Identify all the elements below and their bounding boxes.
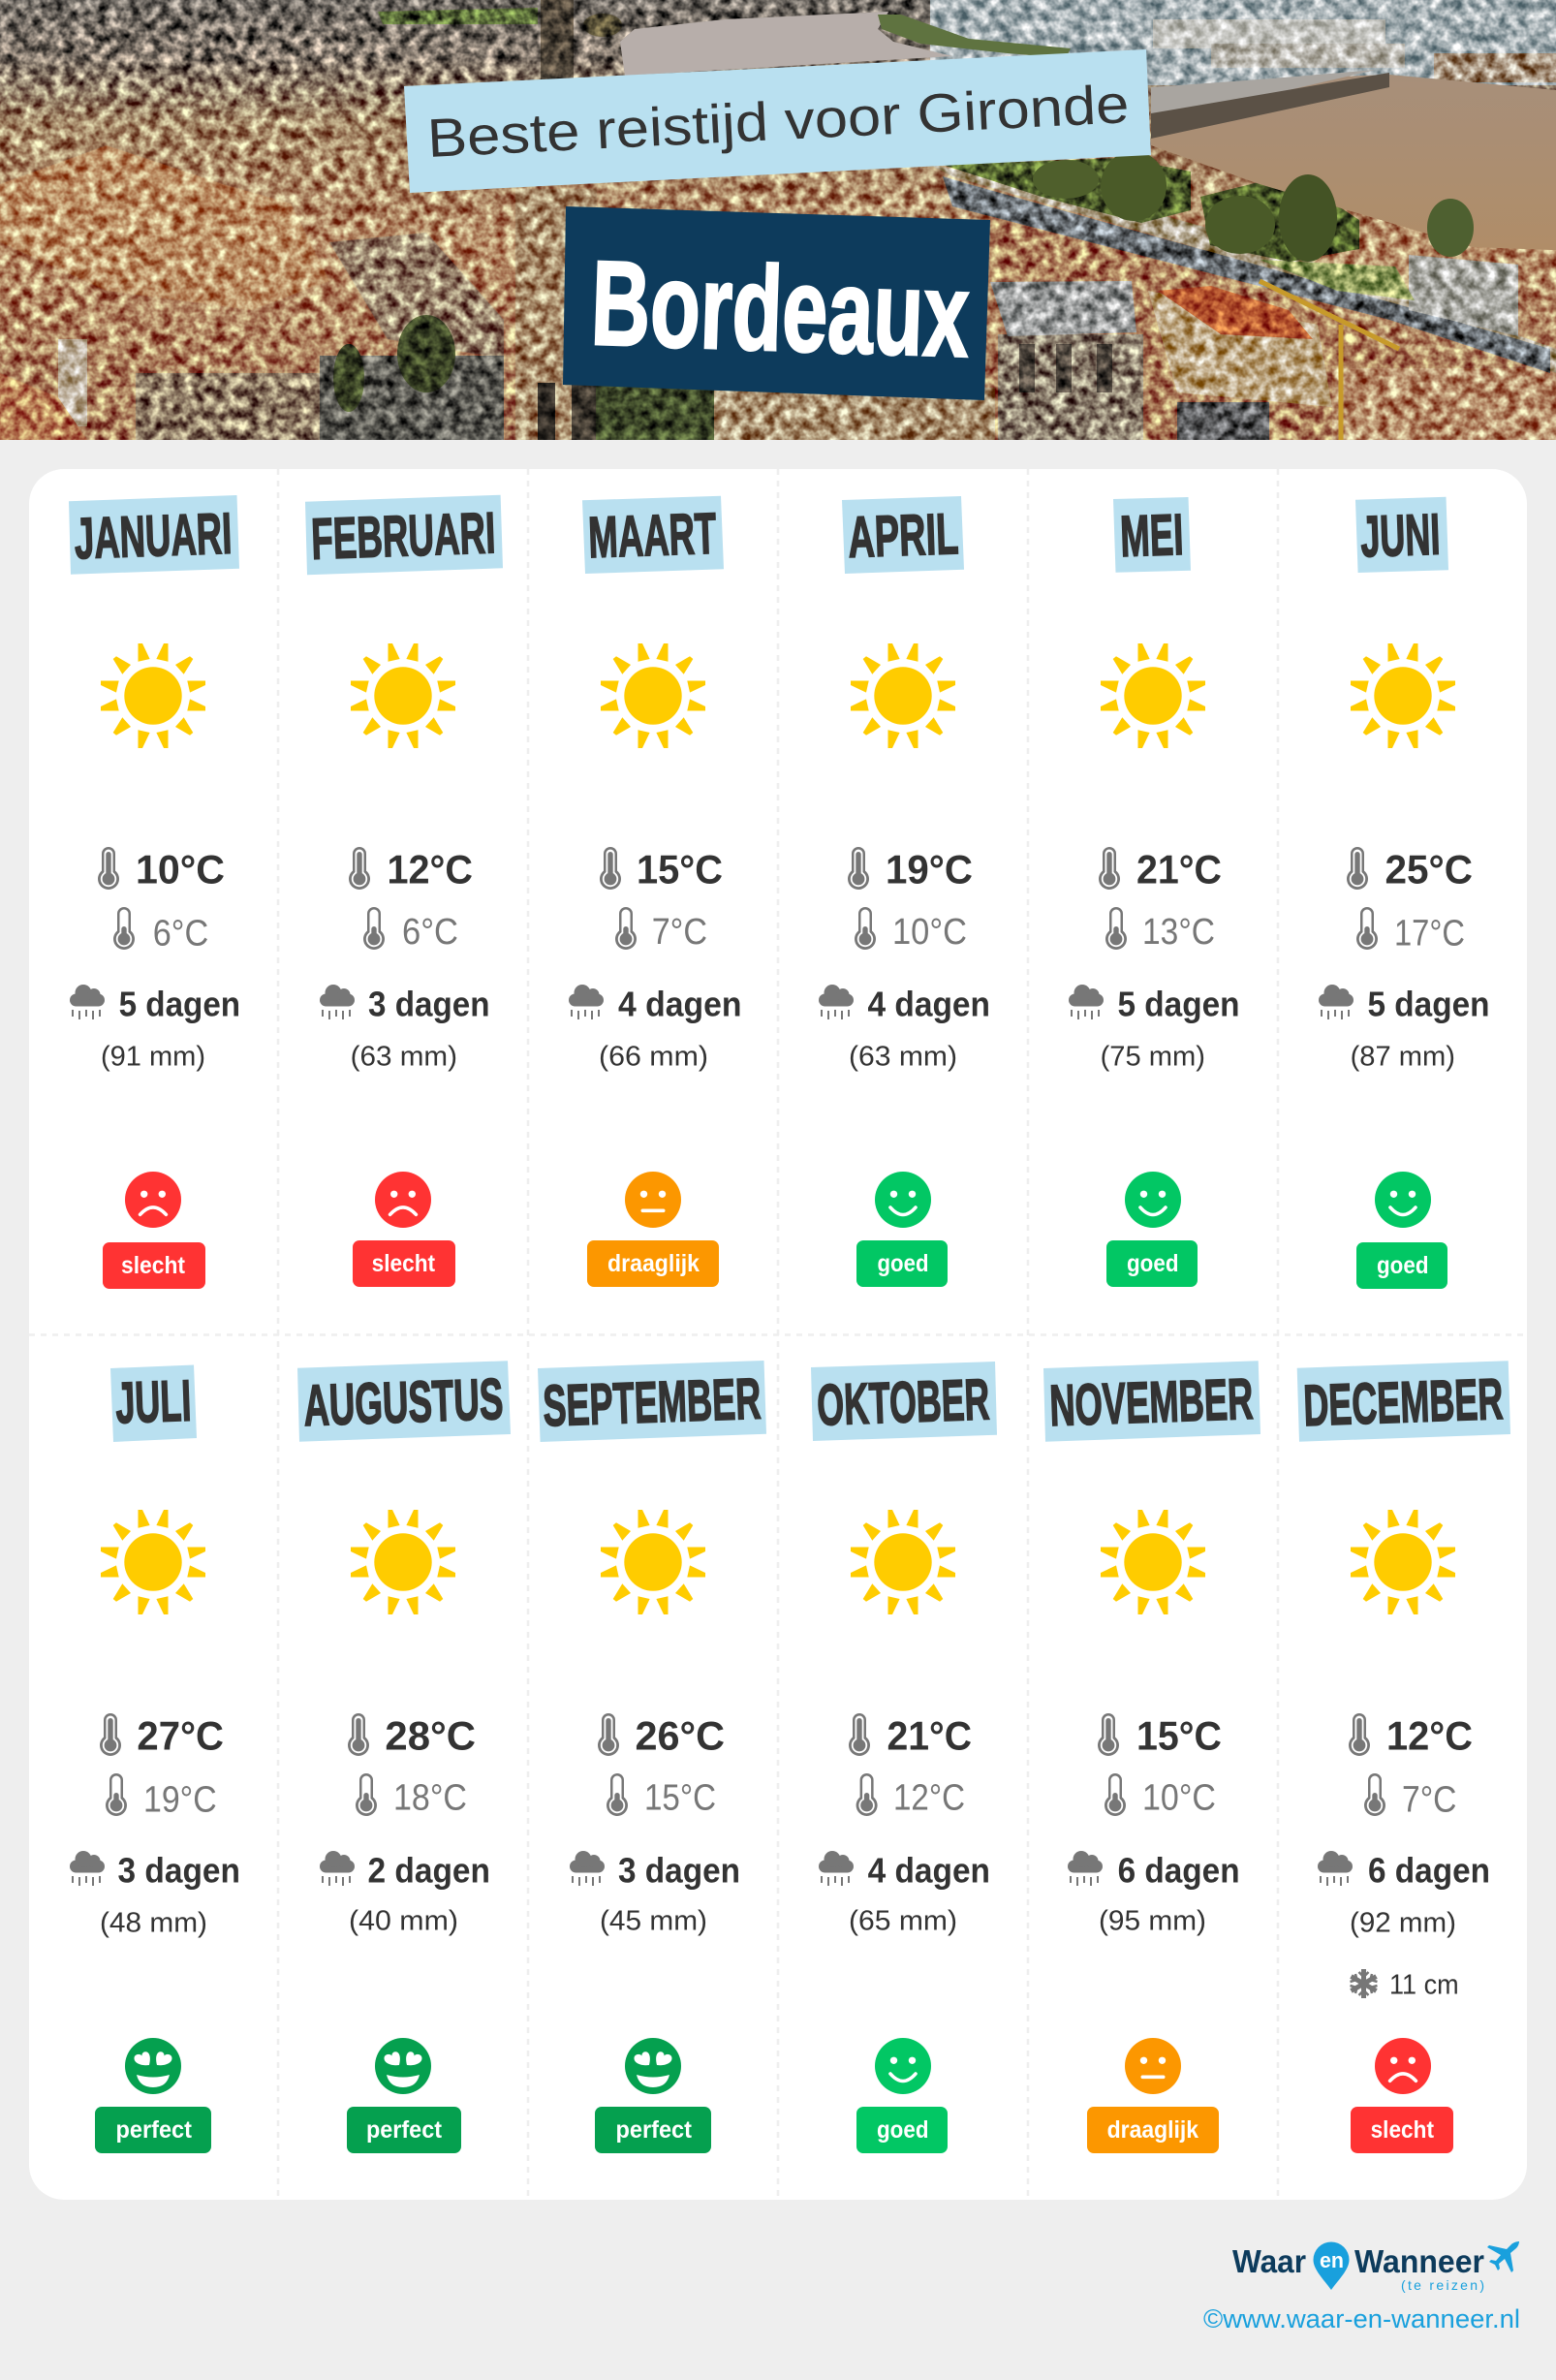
month label — [1043, 1361, 1260, 1442]
high temperature — [849, 1713, 972, 1759]
low temperature: 6°C — [153, 914, 208, 955]
rain days: 6 dagen — [1368, 1850, 1490, 1890]
rain days — [1319, 984, 1490, 1023]
low temperature — [607, 1773, 716, 1819]
low temperature — [106, 1773, 217, 1820]
panel: september — [538, 1361, 766, 2153]
high temperature: 26°C — [636, 1713, 725, 1759]
high temperature: 27°C — [137, 1713, 224, 1759]
rain days: 5 dagen — [1368, 984, 1490, 1023]
precipitation: (63 mm) — [849, 1041, 957, 1072]
low temperature: 6°C — [402, 912, 458, 953]
low temperature: 17°C — [1394, 914, 1465, 955]
icon: rating face — [625, 1172, 681, 1228]
icon: rating face — [1375, 2038, 1431, 2094]
panel: oktober — [811, 1362, 997, 2153]
rating pill: goed — [877, 2116, 928, 2144]
panel: mei — [1069, 497, 1240, 1287]
logo: Waar en Wanneer: Waar — [1232, 2243, 1306, 2279]
rating pill — [103, 1242, 205, 1289]
logo: Waar en Wanneer — [1232, 2241, 1519, 2293]
rain days: 4 dagen — [868, 984, 990, 1023]
rain days: 3 dagen — [618, 1850, 740, 1890]
month label: SEPTEMBER — [542, 1366, 762, 1438]
header photo: aerial view of Bordeaux — [0, 0, 1556, 440]
low temperature — [856, 1773, 965, 1819]
low temperature — [356, 1773, 467, 1819]
rating pill — [587, 1240, 719, 1287]
icon: sun — [1101, 643, 1205, 748]
month label — [538, 1361, 766, 1442]
rain days: 5 dagen — [119, 984, 240, 1023]
calendar card — [29, 469, 1527, 2200]
month label: MEI — [1119, 502, 1184, 569]
rain days — [570, 1850, 740, 1890]
icon: map pin: en — [1320, 2248, 1344, 2272]
high temperature: 15°C — [1136, 1713, 1222, 1759]
precipitation: (95 mm) — [1099, 1906, 1206, 1937]
rain days — [819, 984, 990, 1023]
low temperature — [363, 907, 458, 953]
rating pill: slecht — [1371, 2116, 1435, 2144]
icon: sun — [1351, 1510, 1455, 1614]
rating pill: draaglijk — [1107, 2116, 1198, 2144]
rain days — [70, 984, 240, 1023]
low temperature: 18°C — [393, 1778, 467, 1819]
rain days: 6 dagen — [1118, 1850, 1240, 1890]
month label — [69, 495, 239, 575]
rain days — [320, 1850, 490, 1890]
panel: juli — [70, 1364, 240, 2153]
low temperature: 10°C — [892, 912, 967, 953]
rating pill — [347, 2107, 461, 2153]
icon: plane — [1487, 2241, 1519, 2272]
rating pill — [1351, 2107, 1453, 2153]
rating pill — [1356, 1242, 1447, 1289]
panel: juni — [1319, 497, 1490, 1289]
rain days: 5 dagen — [1118, 984, 1240, 1023]
high temperature — [98, 847, 225, 892]
rating pill: perfect — [116, 2116, 193, 2144]
icon: sun — [101, 643, 205, 748]
icon: rating face — [625, 2038, 681, 2094]
high temperature — [1349, 1713, 1473, 1759]
rain days: 2 dagen — [368, 1850, 490, 1890]
month label — [1113, 497, 1191, 573]
icon: rating face — [1125, 1172, 1181, 1228]
high temperature — [598, 1713, 725, 1759]
low temperature — [113, 907, 208, 955]
rating pill — [353, 1240, 455, 1287]
panel: november — [1043, 1361, 1260, 2153]
rating pill: perfect — [366, 2116, 443, 2144]
rating pill — [856, 1240, 948, 1287]
high temperature — [100, 1713, 224, 1759]
month label: FEBRUARI — [310, 500, 496, 572]
icon: rating face — [375, 2038, 431, 2094]
month label — [582, 496, 724, 574]
rain days — [70, 1850, 240, 1890]
precipitation: (92 mm) — [1350, 1907, 1456, 1938]
month label: OKTOBER — [816, 1366, 990, 1438]
high temperature — [600, 847, 723, 892]
precipitation: (45 mm) — [600, 1906, 707, 1937]
low temperature: 12°C — [893, 1778, 965, 1819]
low temperature — [1105, 907, 1215, 953]
snowfall: 11 cm — [1389, 1970, 1459, 2001]
icon: sun — [601, 1510, 705, 1614]
river upper — [620, 12, 952, 76]
bridge — [1151, 73, 1389, 139]
icon: sun — [601, 643, 705, 748]
panel: december — [1297, 1361, 1510, 2153]
rain days — [1318, 1850, 1490, 1890]
crane — [1260, 281, 1399, 440]
rating pill: draaglijk — [607, 1250, 700, 1277]
precipitation: (63 mm) — [351, 1041, 457, 1072]
low temperature: 10°C — [1142, 1778, 1216, 1819]
rain days — [1068, 1850, 1240, 1890]
month label: NOVEMBER — [1048, 1366, 1254, 1438]
month label: JANUARI — [74, 501, 233, 571]
rain days — [819, 1850, 990, 1890]
month label — [110, 1364, 197, 1442]
rain days: 4 dagen — [868, 1850, 990, 1890]
precipitation: (66 mm) — [599, 1041, 708, 1072]
high temperature — [1098, 1713, 1222, 1759]
high temperature: 12°C — [1386, 1713, 1473, 1759]
high temperature: 15°C — [637, 847, 723, 892]
logo: Waar en Wanneer: Wanneer — [1354, 2243, 1484, 2279]
title banner — [404, 49, 1151, 193]
rating pill: goed — [878, 1250, 928, 1277]
high temperature: 19°C — [886, 847, 973, 892]
icon: sun — [101, 1510, 205, 1614]
month label: APRIL — [847, 501, 959, 570]
rating pill — [1087, 2107, 1219, 2153]
month label: JULI — [114, 1368, 192, 1435]
high temperature — [349, 847, 473, 892]
low temperature — [1356, 907, 1465, 955]
icon: map pin — [1314, 2242, 1349, 2290]
icon: sun — [851, 1510, 955, 1614]
icon: sun — [1101, 1510, 1205, 1614]
precipitation: (65 mm) — [849, 1906, 957, 1937]
high temperature: 10°C — [136, 847, 225, 892]
rating pill: goed — [1127, 1250, 1178, 1277]
panel: februari — [305, 495, 503, 1287]
snowfall — [1351, 1969, 1459, 2001]
precipitation: (91 mm) — [101, 1041, 205, 1072]
rain days: 3 dagen — [118, 1850, 240, 1890]
high temperature: 28°C — [385, 1713, 476, 1759]
panel: april — [819, 496, 990, 1287]
low temperature: 7°C — [652, 912, 707, 953]
high temperature: 25°C — [1385, 847, 1473, 892]
precipitation: (40 mm) — [349, 1906, 458, 1937]
river lower — [1151, 75, 1556, 250]
rating pill — [595, 2107, 711, 2153]
low temperature: 15°C — [644, 1778, 716, 1819]
rating pill: slecht — [121, 1252, 186, 1279]
high temperature: 12°C — [388, 847, 473, 892]
panel: januari — [69, 495, 240, 1289]
rain days: 4 dagen — [618, 984, 742, 1023]
icon: rating face — [1375, 1172, 1431, 1228]
panel: maart — [569, 496, 742, 1287]
rain days — [320, 984, 490, 1023]
icon: sun — [351, 1510, 455, 1614]
month label — [305, 495, 503, 575]
city banner: Bordeaux — [589, 236, 971, 383]
month label — [1355, 497, 1448, 573]
month label — [297, 1361, 511, 1442]
low temperature — [855, 907, 967, 953]
icon: rating face — [125, 1172, 181, 1228]
icon: rating face — [875, 1172, 931, 1228]
high temperature — [848, 847, 973, 892]
icon: sun — [1351, 643, 1455, 748]
icon: rating face — [375, 1172, 431, 1228]
city banner — [563, 206, 990, 400]
icon: rating face — [125, 2038, 181, 2094]
precipitation: (48 mm) — [100, 1907, 207, 1938]
photo texture: rooftops — [0, 0, 1556, 440]
month label: MAART — [587, 501, 717, 570]
low temperature — [1364, 1773, 1457, 1820]
low temperature: 13°C — [1142, 912, 1215, 953]
precipitation: (75 mm) — [1101, 1041, 1205, 1072]
icon: rating face — [875, 2038, 931, 2094]
month label — [811, 1362, 997, 1441]
month label: AUGUSTUS — [302, 1366, 504, 1438]
rain days: 3 dagen — [368, 984, 490, 1023]
panel: augustus — [297, 1361, 511, 2153]
icon: rating face — [1125, 2038, 1181, 2094]
high temperature — [1099, 847, 1222, 892]
icon: sun — [351, 643, 455, 748]
month label — [842, 496, 964, 574]
icon: sun — [851, 643, 955, 748]
rating pill: perfect — [616, 2116, 693, 2144]
website url: ©www.waar-en-wanneer.nl — [1203, 2304, 1520, 2333]
title banner: Beste reistijd voor Gironde — [425, 73, 1131, 169]
rating pill: goed — [1377, 1252, 1428, 1279]
high temperature: 21°C — [1136, 847, 1222, 892]
rating pill — [1106, 1240, 1198, 1287]
low temperature — [1105, 1773, 1216, 1819]
low temperature: 19°C — [143, 1779, 217, 1820]
low temperature: 7°C — [1402, 1779, 1457, 1820]
precipitation: (87 mm) — [1351, 1041, 1455, 1072]
month label: JUNI — [1359, 502, 1441, 569]
rating pill — [95, 2107, 211, 2153]
rain days — [569, 984, 742, 1023]
high temperature — [1347, 847, 1473, 892]
rating pill: slecht — [372, 1250, 436, 1277]
rating pill — [856, 2107, 948, 2153]
rain days — [1069, 984, 1240, 1023]
high temperature: 21°C — [887, 1713, 972, 1759]
logo: Waar en Wanneer: (te reizen) — [1401, 2277, 1484, 2293]
low temperature — [615, 907, 707, 953]
